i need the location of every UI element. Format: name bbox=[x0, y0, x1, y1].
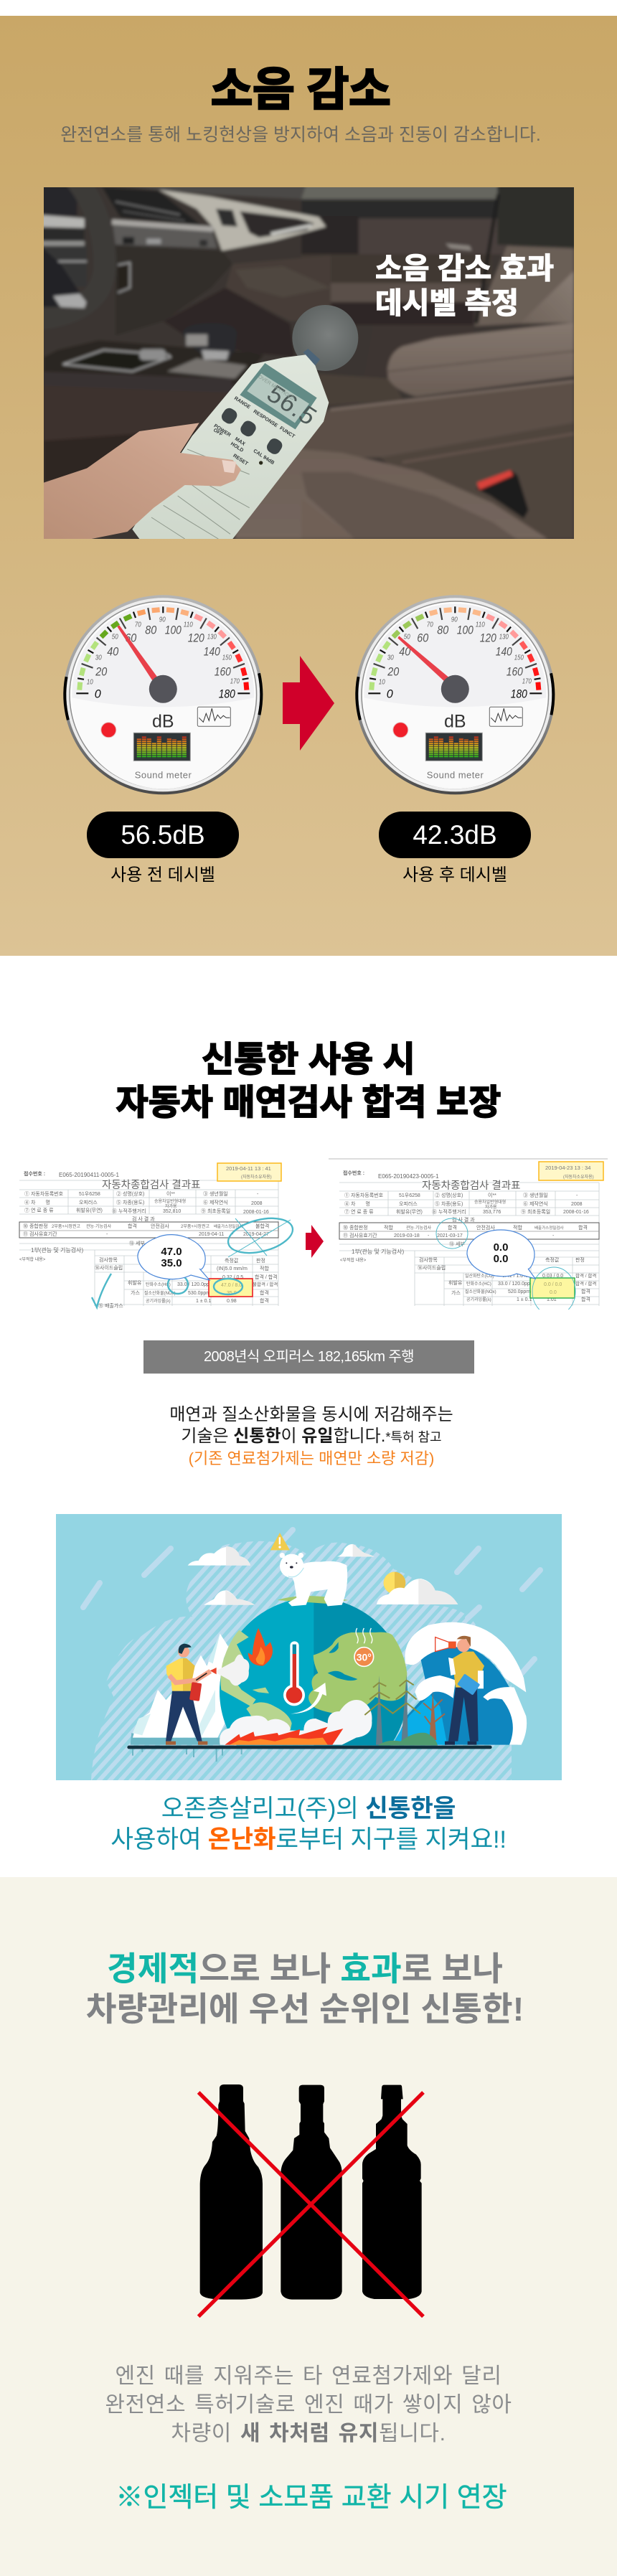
document: inspection report after: 2008 bbox=[571, 1202, 583, 1207]
photo caption: 소음 감소 효과 bbox=[375, 252, 554, 285]
buckle bbox=[476, 471, 529, 519]
scale labels: 180 bbox=[219, 687, 235, 700]
figure: man with extinguisher bbox=[166, 1644, 249, 1745]
document: inspection report before: 불합격 bbox=[255, 1223, 269, 1229]
icon: clouds bbox=[188, 1544, 458, 1605]
label: before: 사용 전 데시벨 bbox=[110, 865, 215, 885]
label: after: 사용 후 데시벨 bbox=[402, 865, 507, 885]
document: inspection report after: 자동차종합검사 결과표 bbox=[422, 1180, 520, 1192]
arrow: before to after bbox=[283, 656, 334, 751]
document: inspection report after: 합격 bbox=[581, 1288, 590, 1294]
document: inspection report after: ⑩ 종합판정 bbox=[343, 1224, 368, 1231]
document: inspection report after: 적합 bbox=[384, 1224, 393, 1231]
scale labels: 140 bbox=[496, 644, 512, 658]
document: inspection report before: ④ 차 명 bbox=[24, 1199, 50, 1205]
document: inspection report before: 적합 bbox=[260, 1265, 269, 1271]
ground bar bbox=[127, 1746, 492, 1762]
icon: sound level meter: RESPONSE bbox=[253, 409, 278, 428]
document: inspection report before: 1부(관능 및 기능검사) bbox=[31, 1246, 83, 1254]
gauge: before: Sound meter bbox=[135, 769, 192, 780]
icon: polar bear bbox=[280, 1553, 347, 1606]
car interior background bbox=[39, 178, 580, 544]
banner: vehicle mileage bbox=[143, 1340, 474, 1374]
document: inspection report before: 안전검사 bbox=[151, 1223, 169, 1229]
document: inspection report before: 접수번호 : bbox=[24, 1170, 45, 1177]
gauge: before: 110 bbox=[184, 621, 193, 629]
scale labels bbox=[387, 623, 527, 700]
gauge: before: dB bbox=[152, 711, 174, 731]
text block: protect the earth: 사용하여 온난화로부터 지구를 지켜요!! bbox=[110, 1826, 507, 1853]
document: inspection report after: 1.01 bbox=[547, 1297, 557, 1302]
document: inspection report before: ⑮ 배출가스 bbox=[98, 1302, 123, 1309]
heading: economical and effective: 차량관리에 우선 순위인 신통한! bbox=[86, 1990, 524, 2028]
document: inspection report after: 0.03 / 0.0 bbox=[542, 1274, 563, 1279]
scale labels: 180 bbox=[511, 687, 527, 700]
icon: globe bbox=[220, 1596, 408, 1745]
colored scale blocks bbox=[369, 608, 541, 686]
gauge: before: 50 bbox=[112, 633, 118, 641]
icon: three crossed-out bottles bbox=[197, 2084, 425, 2318]
document: inspection report before: 불합격 / 합격 bbox=[253, 1281, 278, 1287]
icon: thermometer bbox=[283, 1641, 326, 1714]
gauge: before bbox=[63, 595, 263, 795]
document: inspection report after: 승용차일반형대형 bbox=[474, 1199, 506, 1205]
right console leather bbox=[318, 374, 402, 406]
document: inspection report after: 520.0ppm bbox=[508, 1289, 530, 1294]
panel: noise reduction bbox=[0, 16, 617, 956]
document: inspection report after: 이** bbox=[488, 1192, 496, 1198]
heading: economical and effective: 경제적으로 보나 효과로 보나 bbox=[107, 1950, 503, 1988]
document: inspection report after: 51우6258 bbox=[399, 1193, 420, 1198]
highlight: failed values: 47.0 / 8.0 bbox=[221, 1283, 242, 1288]
photo caption: 데시벨 측정 bbox=[375, 286, 519, 319]
scale labels: 0 bbox=[95, 687, 101, 700]
document: inspection report before: 530.0ppm bbox=[188, 1291, 210, 1296]
document: inspection report before: 352,810 bbox=[163, 1209, 181, 1214]
text block: exclusive technology: 기술은 신통한이 유일합니다.*특허 참고 bbox=[181, 1426, 442, 1446]
document: inspection report after: 합격 bbox=[581, 1296, 590, 1302]
icon: sound level meter: POWER bbox=[213, 423, 232, 438]
text block: protect the earth bbox=[110, 1795, 507, 1853]
document: inspection report before: 자동차종합검사 결과표 bbox=[102, 1179, 200, 1191]
document: inspection report after: ⑧ 누적주행거리 bbox=[432, 1208, 466, 1215]
callout: 47.0 35.0 bbox=[138, 1235, 209, 1280]
document: inspection report before: - bbox=[232, 1232, 234, 1237]
icon: sound level meter bbox=[132, 354, 329, 539]
callout: 47.0 35.0: 47.0 bbox=[161, 1246, 182, 1258]
document: inspection report before: ② 성명(상호) bbox=[116, 1190, 144, 1197]
document: inspection report before: ① 자동차등록번호 bbox=[24, 1190, 64, 1197]
document: inspection report after: 탄화수소(HC) bbox=[466, 1281, 491, 1287]
document: inspection report before: - bbox=[106, 1232, 108, 1237]
highlight: date box: (자동차소유자용) bbox=[563, 1174, 594, 1180]
document: inspection report after: ① 자동차등록번호 bbox=[344, 1192, 384, 1198]
pill: after value bbox=[379, 812, 531, 858]
document: inspection report after: 공기과잉률(λ) bbox=[466, 1297, 491, 1302]
icon: tsunami wave bbox=[392, 1622, 527, 1745]
document: inspection report after: 적합 bbox=[513, 1224, 522, 1231]
highlight: passed values: 0.0 bbox=[550, 1290, 557, 1295]
callout: 0.0 0.0 bbox=[467, 1230, 535, 1279]
pill: before value: 56.5dB bbox=[121, 820, 205, 850]
heading: economical and effective bbox=[86, 1950, 524, 2028]
scale labels: 160 bbox=[507, 664, 523, 678]
document: inspection report after: 합격 bbox=[578, 1224, 588, 1231]
heading: emissions test bbox=[116, 1040, 501, 1122]
document: inspection report before: ⑤ 차종(용도) bbox=[116, 1199, 144, 1205]
callout: extended replacement interval: ※인젝터 및 소모품 교환 시기 연장 bbox=[116, 2483, 507, 2513]
highlight: date box: (자동차소유자용) bbox=[241, 1174, 272, 1180]
document: inspection report after: 휘발유 bbox=[448, 1279, 463, 1286]
document: inspection report after: 질소산화물(NOx) bbox=[465, 1289, 496, 1294]
icon: smoke and fire bbox=[220, 1700, 372, 1745]
document: inspection report after: ⑭사이드슬립 bbox=[418, 1264, 446, 1271]
gauge: after: 90 bbox=[451, 616, 458, 624]
document: inspection report after: 판정 bbox=[575, 1256, 585, 1263]
document: inspection report before: ⑪ 검사유효기간 bbox=[23, 1231, 57, 1237]
gauge: after: Sound meter bbox=[427, 769, 484, 780]
console bbox=[44, 340, 264, 386]
text block: protect the earth: 오존층살리고(주)의 신통한을 bbox=[161, 1795, 456, 1823]
document: inspection report after: - bbox=[576, 1193, 578, 1198]
gauge: after: 170 bbox=[522, 677, 532, 685]
scale labels: 0 bbox=[387, 687, 393, 700]
document: inspection report before: ⑥ 제작연식 bbox=[203, 1199, 228, 1205]
document: inspection report before: ⑭사이드슬립 bbox=[95, 1264, 123, 1271]
panel: economical bbox=[0, 1877, 617, 2576]
gauge: before: 130 bbox=[207, 633, 217, 641]
heading: noise reduction: 소음 감소 bbox=[211, 64, 390, 116]
document: inspection report before: 검사항목 bbox=[99, 1256, 118, 1263]
gauge: before: 90 bbox=[159, 616, 166, 624]
document: inspection report after: 0.41 / 1.0% bbox=[502, 1274, 527, 1279]
document: inspection report before: (IN)5.0 mm/m bbox=[217, 1266, 248, 1271]
document: inspection report after: 오피러스 bbox=[399, 1200, 418, 1207]
icon: sound level meter: FUNCT bbox=[278, 426, 296, 440]
icon: 30 degree badge: 30° bbox=[357, 1651, 372, 1663]
text block: exclusive technology bbox=[169, 1405, 453, 1467]
arrow: small bbox=[306, 1225, 324, 1258]
document: inspection report after: 2019-03-18 bbox=[394, 1233, 420, 1238]
gauge: after: 150 bbox=[514, 654, 524, 662]
document: inspection report after: 측정값 bbox=[545, 1256, 560, 1263]
document: inspection report after: ⑥ 제작연식 bbox=[523, 1200, 548, 1207]
gauge: before: 150 bbox=[222, 654, 232, 662]
text block: keeps like new: 완전연소 특허기술로 엔진 때가 쌓이지 않아 bbox=[105, 2393, 512, 2417]
highlight: date box bbox=[539, 1162, 603, 1180]
document: inspection report after: ⑤ 차종(용도) bbox=[435, 1200, 463, 1207]
document: inspection report before: 51우6258 bbox=[79, 1191, 100, 1197]
document: inspection report before: E065-20190411-0005-1 bbox=[59, 1172, 119, 1178]
scale labels: 80 bbox=[145, 623, 157, 636]
pen marks bbox=[436, 1218, 575, 1316]
document: inspection report after: 합격 bbox=[448, 1224, 457, 1231]
scale labels bbox=[95, 623, 235, 700]
text block: exclusive technology: 매연과 질소산화물을 동시에 저감해주는 bbox=[169, 1405, 453, 1424]
document: inspection report before: 측정값 bbox=[225, 1257, 239, 1264]
document: inspection report after: 자가용 bbox=[485, 1204, 497, 1210]
document: inspection report after: 353,776 bbox=[483, 1210, 501, 1215]
highlight: date box bbox=[217, 1163, 281, 1181]
photo caption bbox=[375, 252, 554, 319]
text block: keeps like new: 엔진 때를 지워주는 타 연료첨가제와 달리 bbox=[115, 2364, 502, 2388]
gauge: before: 10 bbox=[87, 678, 93, 686]
document: inspection report after: 휘발유(무연) bbox=[396, 1208, 423, 1215]
document: inspection report after: E065-20190423-0005-1 bbox=[378, 1173, 439, 1180]
scale labels: 40 bbox=[399, 644, 411, 658]
document: inspection report before: ⑨ 최초등록일 bbox=[201, 1208, 230, 1214]
document: inspection report after: 관능·기능검사 bbox=[406, 1225, 432, 1231]
document: inspection report before: 오피러스 bbox=[79, 1199, 98, 1205]
document: inspection report before: 검 사 결 과 bbox=[132, 1216, 155, 1222]
figure: man with megaphone bbox=[435, 1636, 484, 1745]
icon: sound level meter: 56.5 bbox=[262, 380, 323, 431]
document: inspection report before: ⑬ 세부 bbox=[129, 1240, 145, 1246]
document: inspection report after: 가스 bbox=[451, 1289, 461, 1296]
gauge: after: 130 bbox=[499, 633, 509, 641]
icon: sound level meter: HOLD bbox=[230, 441, 244, 453]
scale labels: 60 bbox=[125, 631, 137, 644]
ticks bbox=[368, 606, 542, 693]
document: inspection report after: 안전검사 bbox=[476, 1224, 495, 1231]
document: inspection report before: 합격 bbox=[260, 1289, 269, 1296]
armrest bbox=[387, 322, 574, 397]
document: inspection report after: <부적합 내용> bbox=[340, 1257, 367, 1263]
illustration: global warming bbox=[56, 1514, 562, 1780]
heading: emissions test: 신통한 사용 시 bbox=[202, 1040, 415, 1079]
pill: after value: 42.3dB bbox=[413, 820, 497, 850]
pen marks bbox=[92, 1213, 296, 1307]
document: inspection report before: 가스 bbox=[131, 1289, 140, 1296]
document: inspection report after: 합격 / 합격 bbox=[575, 1272, 596, 1279]
document: inspection report after: 2021-03-17 bbox=[437, 1233, 463, 1238]
document: inspection report before: 휘발유 bbox=[128, 1279, 142, 1286]
ticks bbox=[76, 606, 250, 693]
scale labels: 20 bbox=[95, 664, 108, 678]
document: inspection report after: ⑦ 연 료 종 류 bbox=[344, 1209, 374, 1215]
icon: hand holding meter bbox=[44, 423, 241, 539]
document: inspection report before: 승용차일반형대형 bbox=[154, 1198, 186, 1204]
gauge: after: 110 bbox=[476, 621, 485, 629]
document: inspection report after: 접수번호 : bbox=[343, 1170, 364, 1176]
banner: vehicle mileage: 2008년식 오피러스 182,165km 주행 bbox=[204, 1349, 414, 1365]
document: inspection report before: 판정 bbox=[256, 1257, 265, 1264]
callout: 0.0 0.0: 0.0 bbox=[494, 1253, 508, 1265]
icon: sound level meter: OFF bbox=[212, 428, 224, 438]
scale labels: 80 bbox=[437, 623, 449, 636]
highlight: failed values bbox=[209, 1279, 253, 1297]
colored scale blocks bbox=[77, 608, 249, 686]
callout: 47.0 35.0: 35.0 bbox=[161, 1257, 182, 1269]
document: inspection report after: 1 ± 0.1 bbox=[517, 1297, 532, 1302]
document: inspection report before: 2부품+시정권고 bbox=[52, 1223, 80, 1229]
document: inspection report after: 검 사 결 과 bbox=[452, 1216, 475, 1223]
icon: sun bbox=[384, 1572, 405, 1594]
document: inspection report after: 33.0 / 120.0ppm bbox=[498, 1282, 534, 1287]
scale labels: 40 bbox=[107, 644, 119, 658]
document: inspection report before: ⑧ 누적주행거리 bbox=[112, 1208, 146, 1214]
document: inspection report after: 1m bbox=[502, 1266, 509, 1271]
gauge: after bbox=[355, 595, 555, 795]
document: inspection report before: ⑩ 종합판정 bbox=[23, 1223, 48, 1229]
document: inspection report after: 2008-01-16 bbox=[563, 1210, 589, 1215]
icon: sound level meter: RESET bbox=[232, 453, 249, 467]
icon: sound level meter: CAL 94dB bbox=[253, 448, 275, 466]
document: inspection report before bbox=[19, 1162, 294, 1310]
document: inspection report after: ③ 생년월일 bbox=[523, 1192, 548, 1198]
document: inspection report before: 탄화수소(HC) bbox=[146, 1282, 171, 1287]
gauge: after: 70 bbox=[427, 621, 433, 629]
document: inspection report before: 2019-04-11 bbox=[199, 1232, 224, 1237]
heading: emissions test: 자동차 매연검사 합격 보장 bbox=[116, 1083, 501, 1122]
document: inspection report before: 33.0 / 120.0ppm bbox=[177, 1282, 214, 1287]
text block: exclusive technology: (기존 연료첨가제는 매연만 소량 저감) bbox=[189, 1449, 434, 1467]
scale labels: 60 bbox=[417, 631, 429, 644]
document: inspection report after: ② 성명(상호) bbox=[435, 1192, 463, 1198]
icon: trees and bush bbox=[364, 1674, 445, 1745]
dash and silver trim bbox=[101, 182, 307, 199]
photo: sound meter in car interior bbox=[44, 187, 574, 539]
document: inspection report after bbox=[329, 1158, 608, 1310]
document: inspection report after: - bbox=[428, 1233, 430, 1238]
gauge: before: 30 bbox=[95, 654, 102, 662]
document: inspection report after: 1부(관능 및 기능검사) bbox=[352, 1248, 404, 1255]
document: inspection report after: ④ 차 명 bbox=[344, 1200, 370, 1207]
document: inspection report before: 2019-04-27 bbox=[243, 1232, 269, 1237]
gauge: before: 170 bbox=[230, 677, 240, 685]
document: inspection report before: ⑦ 연 료 종 류 bbox=[24, 1208, 54, 1213]
document: inspection report before: <부적합 내용> bbox=[19, 1256, 46, 1262]
text block: keeps like new bbox=[105, 2364, 512, 2445]
document: inspection report before: 0.32 / 0.5 bbox=[222, 1275, 243, 1280]
gauge: after: 50 bbox=[404, 633, 410, 641]
document: inspection report before: 0.98 bbox=[227, 1299, 237, 1304]
document: inspection report after: ⑨ 최초등록일 bbox=[521, 1208, 550, 1215]
highlight: passed values bbox=[530, 1278, 575, 1298]
document: inspection report after: 일산화탄소(CO) bbox=[465, 1273, 494, 1279]
gauge: after: 10 bbox=[379, 678, 385, 686]
document: inspection report before: 관능·기능검사 bbox=[86, 1223, 112, 1229]
hatched cloud backdrop bbox=[91, 1541, 512, 1780]
highlight: passed values: 0.0 / 0.0 bbox=[544, 1282, 562, 1287]
icon: ice mountain bbox=[131, 1634, 228, 1745]
text block: keeps like new: 차량이 새 차처럼 유지됩니다. bbox=[171, 2422, 446, 2445]
gauge: after: dB bbox=[444, 711, 466, 731]
gauge: before: 70 bbox=[135, 621, 141, 629]
scale labels: 20 bbox=[387, 664, 400, 678]
pill: before value bbox=[87, 812, 239, 858]
icon: microphone foam ball bbox=[292, 305, 358, 371]
highlight: date box: 2019-04-11 13 : 41 bbox=[226, 1165, 271, 1172]
callout: 0.0 0.0: 0.0 bbox=[494, 1241, 508, 1254]
scale labels: 120 bbox=[188, 631, 204, 644]
document: inspection report before: 질소산화물(NOx) bbox=[144, 1290, 176, 1296]
steering wheel bbox=[39, 182, 77, 216]
document: inspection report before: 합격 bbox=[260, 1297, 269, 1304]
document: inspection report after: ⑪ 검사유효기간 bbox=[343, 1232, 377, 1238]
document: inspection report after: - bbox=[552, 1233, 555, 1238]
document: inspection report before: 2008-01-16 bbox=[243, 1210, 269, 1215]
scale labels: 100 bbox=[165, 623, 182, 636]
document: inspection report after: 검사항목 bbox=[419, 1256, 438, 1263]
icon: sound level meter: OVER MAX HOLD bbox=[257, 375, 295, 401]
document: inspection report before: 2008 bbox=[251, 1201, 263, 1206]
document: inspection report before: 배출가스정밀검사 bbox=[214, 1223, 242, 1229]
document: inspection report before: ③ 생년월일 bbox=[203, 1190, 228, 1197]
document: inspection report after: 배출가스정밀검사 bbox=[534, 1225, 563, 1231]
gauge: after: 30 bbox=[387, 654, 394, 662]
highlight: date box: 2019-04-23 13 : 34 bbox=[545, 1165, 590, 1171]
scale labels: 100 bbox=[457, 623, 474, 636]
icon: 30 degree badge bbox=[354, 1628, 374, 1666]
document: inspection report before: 이** bbox=[166, 1190, 175, 1197]
icon: flame bbox=[248, 1628, 273, 1666]
document: inspection report after: ⑬ 세부 bbox=[449, 1241, 465, 1247]
document: inspection report before: 공기과잉률(λ) bbox=[146, 1298, 171, 1304]
icon: sound level meter: RANGE bbox=[233, 396, 251, 410]
document: inspection report before: 합격 / 합격 bbox=[255, 1274, 278, 1280]
scale labels: 120 bbox=[480, 631, 496, 644]
document: inspection report before: 1 ± 0.1 bbox=[196, 1299, 211, 1304]
scale labels: 140 bbox=[204, 644, 220, 658]
document: inspection report before: 자가용 bbox=[165, 1203, 177, 1209]
icon: sound level meter: MAX bbox=[234, 436, 246, 447]
icon: warning sign bbox=[270, 1533, 290, 1550]
document: inspection report before: 2부품+시정권고 bbox=[181, 1223, 209, 1229]
document: inspection report before: - bbox=[257, 1192, 259, 1197]
document: inspection report before: 휘발유(무연) bbox=[76, 1207, 103, 1213]
highlight: failed values: 35.0 bbox=[227, 1291, 237, 1296]
document: inspection report after: 합격 / 합격 bbox=[575, 1280, 596, 1287]
subtitle: 완전연소를 통해 노킹현상을 방지하여 소음과 진동이 감소합니다. bbox=[60, 125, 541, 145]
scale labels: 160 bbox=[215, 664, 231, 678]
document: inspection report before: 합격 bbox=[128, 1223, 137, 1229]
